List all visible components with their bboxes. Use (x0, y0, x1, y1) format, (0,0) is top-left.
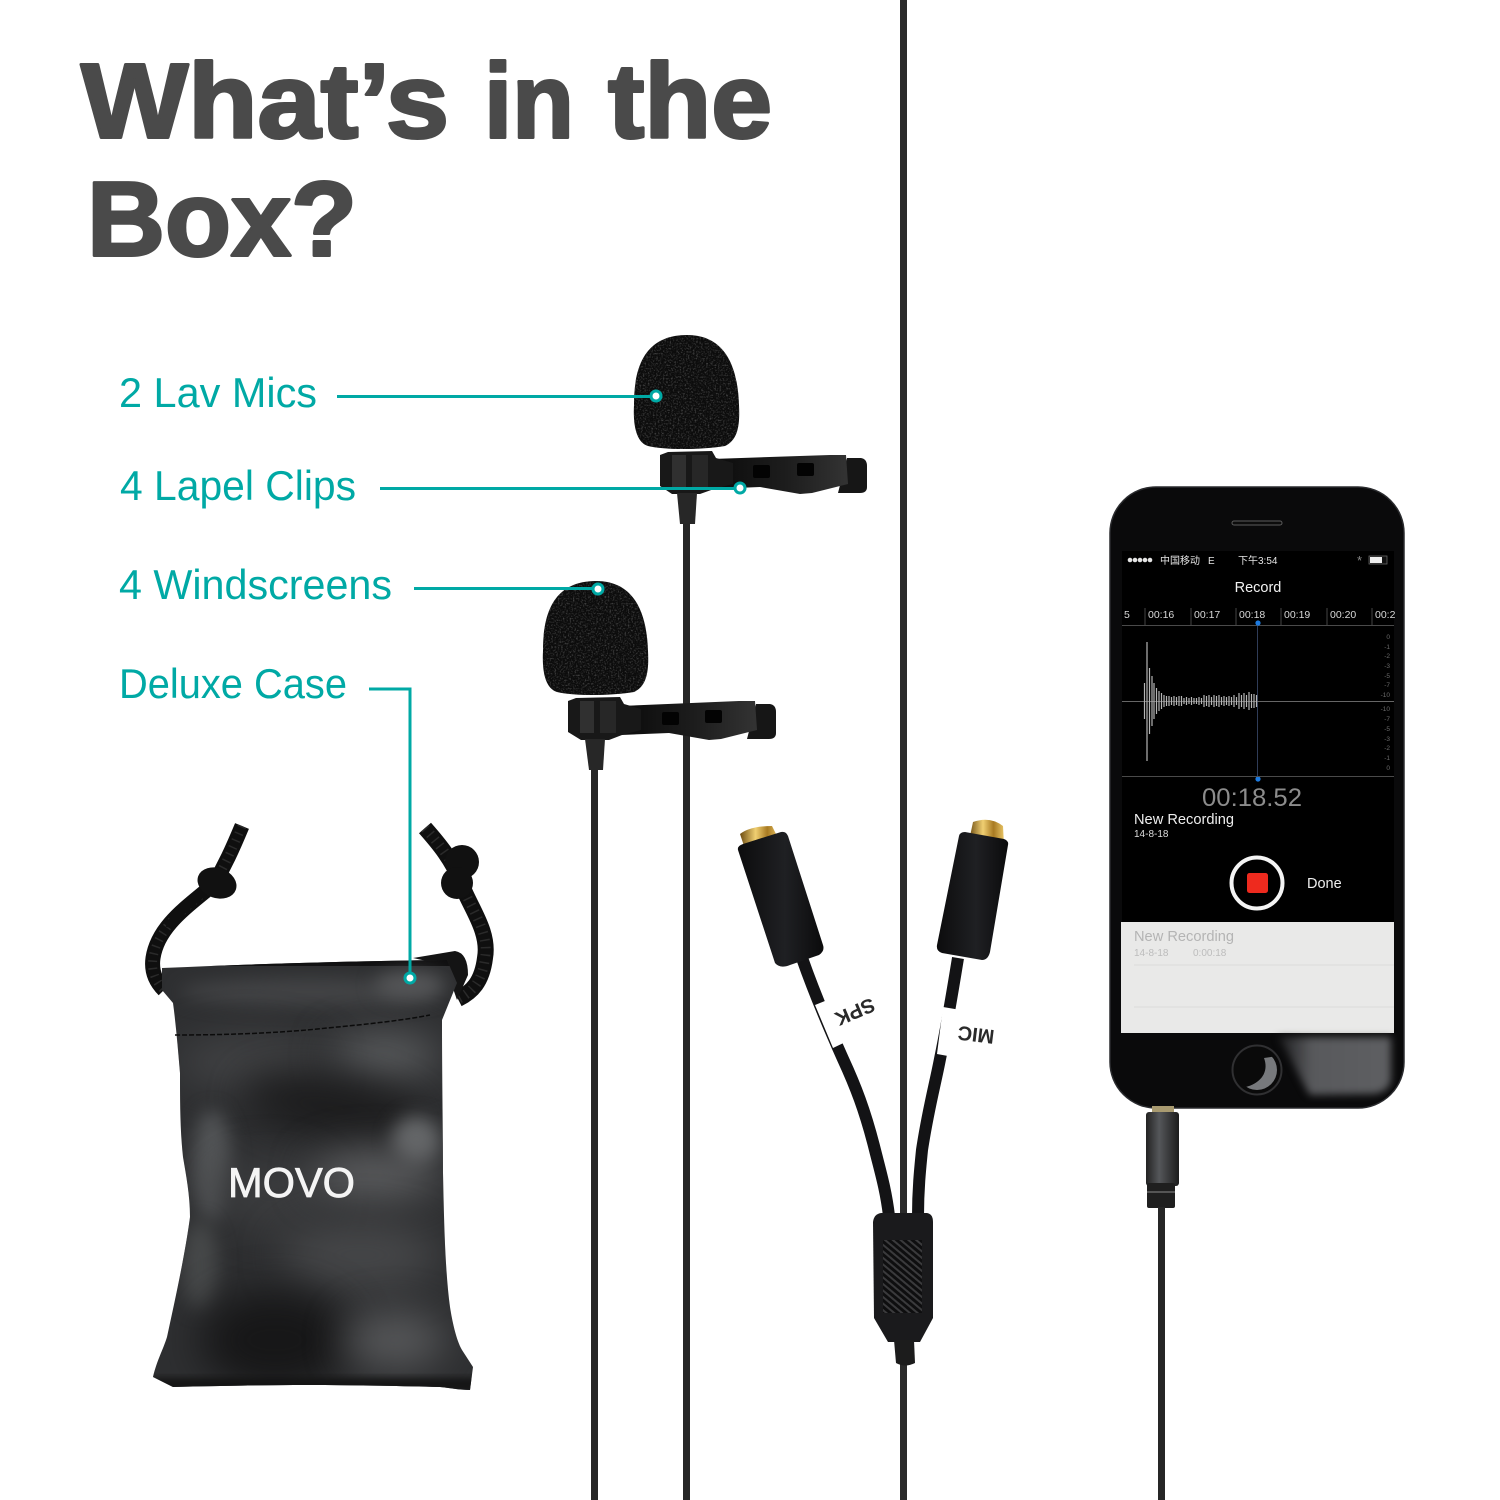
decibel scale: -2 (1384, 745, 1390, 752)
callout: 2 lav mics: 2 Lav Mics (119, 369, 317, 416)
phone cable (1158, 1207, 1165, 1500)
splitter adapter (738, 820, 1008, 1366)
waveform (1122, 642, 1394, 761)
left barrel (738, 832, 824, 967)
decibel scale: -7 (1384, 716, 1390, 723)
drawstring left (153, 826, 242, 990)
decibel scale: -5 (1384, 673, 1390, 680)
mic stem 1 (677, 493, 697, 524)
timeline: 00:16 (1148, 609, 1174, 621)
cable: right branch (918, 958, 958, 1216)
recording date: 14-8-18 (1134, 829, 1169, 840)
title: the (608, 42, 772, 160)
decibel scale: -10 (1381, 706, 1390, 713)
lav mic cable 1 (683, 520, 690, 1500)
bag body (153, 960, 473, 1390)
mic stem 2 (585, 739, 605, 770)
decibel scale: 0 (1386, 634, 1390, 641)
screen (1122, 551, 1394, 922)
left gold connector (740, 826, 779, 852)
title (81, 42, 772, 278)
SPK label: SPK (831, 993, 878, 1029)
timeline (1122, 608, 1396, 626)
playhead (1255, 620, 1261, 782)
MIC label (937, 1007, 1006, 1064)
status bar: 中国移动 (1160, 554, 1200, 567)
drawstring right (425, 828, 486, 999)
callout: 2 lav mics (119, 369, 661, 416)
lav mic 2 (543, 581, 776, 770)
callout: 4 windscreens: 4 Windscreens (119, 561, 392, 608)
MOVO logo: MOVO (228, 1159, 355, 1206)
timeline: 00:2 (1375, 609, 1396, 621)
status bar: * (1357, 553, 1362, 568)
timer: 00:18.52 (1202, 784, 1302, 812)
done label: Done (1307, 876, 1342, 892)
SPK label (815, 986, 883, 1048)
right gold connector (969, 820, 1004, 845)
bag seam (175, 1015, 430, 1035)
splitter tail (894, 1340, 915, 1366)
timeline: 00:20 (1330, 609, 1356, 621)
timeline: 5 (1124, 609, 1130, 621)
right barrel (937, 832, 1008, 960)
recording name: New Recording (1134, 812, 1234, 828)
decibel scale: 0 (1386, 765, 1390, 772)
callout: deluxe case: Deluxe Case (119, 660, 347, 707)
decibel scale: -1 (1384, 644, 1390, 651)
callout: deluxe case (119, 660, 415, 983)
recordings list: 14-8-18 (1134, 948, 1169, 959)
lapel clip 1 (660, 451, 867, 494)
status bar: E (1208, 556, 1215, 567)
deluxe case (150, 826, 486, 1392)
headphone jack plug (1146, 1106, 1179, 1208)
decibel scale: -10 (1381, 692, 1390, 699)
phone (1110, 487, 1404, 1500)
lav mic 1 (634, 335, 867, 524)
callout: 4 windscreens (119, 561, 603, 608)
lav mic cable 2 (591, 765, 598, 1500)
cable: left branch (802, 958, 889, 1216)
timeline: 00:19 (1284, 609, 1310, 621)
callout: 4 lapel clips (120, 462, 745, 509)
home button (1232, 1046, 1284, 1097)
speaker (1232, 521, 1282, 525)
lapel clip 2 (568, 697, 776, 740)
foam windscreen 2 (543, 581, 648, 695)
decibel scale: -3 (1384, 663, 1390, 670)
baseline rule (1122, 776, 1394, 777)
foam windscreen 1 (634, 335, 739, 449)
glass reflection (1278, 1037, 1391, 1095)
decibel scale: -5 (1384, 726, 1390, 733)
title: in (484, 42, 574, 160)
decibel scale (1381, 634, 1390, 772)
decibel scale: -3 (1384, 736, 1390, 743)
bag shading (150, 958, 480, 1392)
record button (1232, 858, 1282, 908)
decibel scale: -2 (1384, 653, 1390, 660)
recordings list: 0:00:18 (1193, 948, 1227, 959)
center vertical cable (900, 0, 907, 1500)
recordings list: New Recording (1134, 929, 1234, 945)
title: Box? (87, 160, 357, 278)
bag back flap (413, 951, 468, 1000)
splitter grip (883, 1240, 922, 1313)
decibel scale: -1 (1384, 755, 1390, 762)
timeline: 00:18 (1239, 609, 1265, 621)
status bar (1128, 553, 1387, 568)
splitter body (873, 1213, 933, 1342)
record heading: Record (1235, 580, 1281, 596)
title: What’s (81, 42, 449, 160)
status bar: 下午3:54 (1238, 554, 1278, 567)
phone body (1110, 487, 1404, 1108)
callout: 4 lapel clips: 4 Lapel Clips (120, 462, 356, 509)
decibel scale: -7 (1384, 682, 1390, 689)
timeline: 00:17 (1194, 609, 1220, 621)
recordings list (1121, 922, 1394, 1033)
MIC label: MIC (957, 1021, 996, 1047)
